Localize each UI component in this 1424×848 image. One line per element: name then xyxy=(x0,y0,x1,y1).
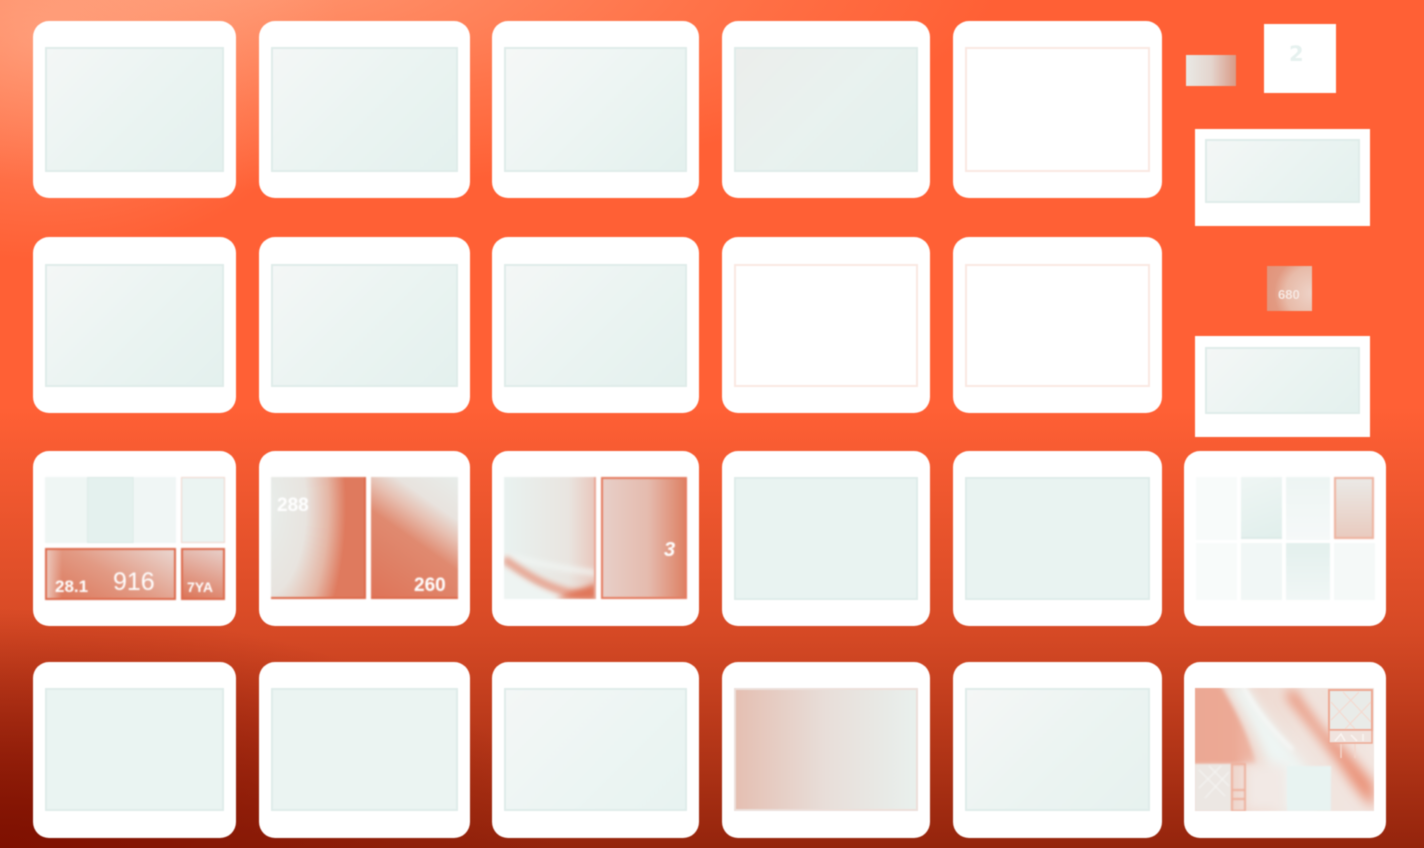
cell: bottom right xyxy=(181,548,225,600)
cell: top middle xyxy=(87,477,134,543)
cell 1 xyxy=(1196,477,1237,540)
cell: top third xyxy=(134,477,176,543)
card: row 3 column 1, treemap xyxy=(33,451,236,626)
card: row 3 column 5 xyxy=(953,451,1162,626)
streak panel xyxy=(1194,687,1374,812)
card: row 1 column 1 xyxy=(33,21,236,198)
value 7YA: 7YA xyxy=(187,579,213,595)
white square tile with number xyxy=(1264,24,1336,93)
cell 8 xyxy=(1334,543,1375,600)
cell 2 xyxy=(1241,477,1282,539)
card: row 1 column 3 xyxy=(492,21,699,198)
tick marks xyxy=(1341,744,1355,758)
card: row 4 column 5 xyxy=(953,662,1162,838)
card: row 2 column 3 xyxy=(492,237,699,413)
card: row 2 column 2 xyxy=(259,237,470,413)
lower left block xyxy=(1195,764,1231,811)
card: row 3 column 3, two panels xyxy=(492,451,699,626)
lower left ladder xyxy=(1232,764,1245,811)
card: row 4 column 1 xyxy=(33,662,236,838)
cell 6 xyxy=(1241,543,1282,600)
card: row 3 column 2, two panels xyxy=(259,451,470,626)
upper left wedge xyxy=(1194,688,1256,765)
card: row 1 column 2 xyxy=(259,21,470,198)
card: row 4 column 4, tinted panel xyxy=(722,662,930,838)
card: row 1 column 4 xyxy=(722,21,930,198)
cell 5 xyxy=(1196,543,1237,600)
card: row 2 column 1 xyxy=(33,237,236,413)
diagonal streak xyxy=(1287,690,1374,808)
left panel xyxy=(503,476,597,600)
value 916: 916 xyxy=(113,568,155,596)
value 260: 260 xyxy=(414,575,446,596)
cell: top right xyxy=(181,477,225,543)
pale block xyxy=(1287,766,1331,811)
cell: bottom wide xyxy=(45,548,176,600)
small gradient swatch xyxy=(1186,55,1236,86)
lower left fill xyxy=(1245,764,1287,811)
card: row 4 column 2 xyxy=(259,662,470,838)
card: row 4 column 6, streaked treemap xyxy=(1184,662,1386,838)
number 680: 680 xyxy=(1278,287,1300,302)
cell 3 xyxy=(1286,477,1330,540)
side card: lower xyxy=(1195,336,1370,437)
left panel xyxy=(271,477,366,599)
right panel xyxy=(371,477,458,599)
cell: top left xyxy=(45,477,87,543)
value 28.1: 28.1 xyxy=(55,577,88,596)
upper right strip xyxy=(1329,730,1372,743)
card: row 3 column 4 xyxy=(722,451,930,626)
upper right block xyxy=(1329,690,1372,730)
small gradient tile with number xyxy=(1267,266,1312,311)
white streak xyxy=(1226,688,1306,809)
number 2: 2 xyxy=(1289,42,1304,66)
card: row 2 column 4 xyxy=(722,237,930,413)
side card: upper xyxy=(1195,129,1370,226)
cell 4 xyxy=(1334,477,1374,539)
card: row 3 column 6, eight cells xyxy=(1184,451,1386,626)
card: row 1 column 5 xyxy=(953,21,1162,198)
value 3: 3 xyxy=(664,539,675,561)
right panel xyxy=(601,477,687,599)
cell 7 xyxy=(1286,543,1330,600)
card: row 2 column 5 xyxy=(953,237,1162,413)
value 288: 288 xyxy=(277,495,309,516)
card: row 4 column 3 xyxy=(492,662,699,838)
